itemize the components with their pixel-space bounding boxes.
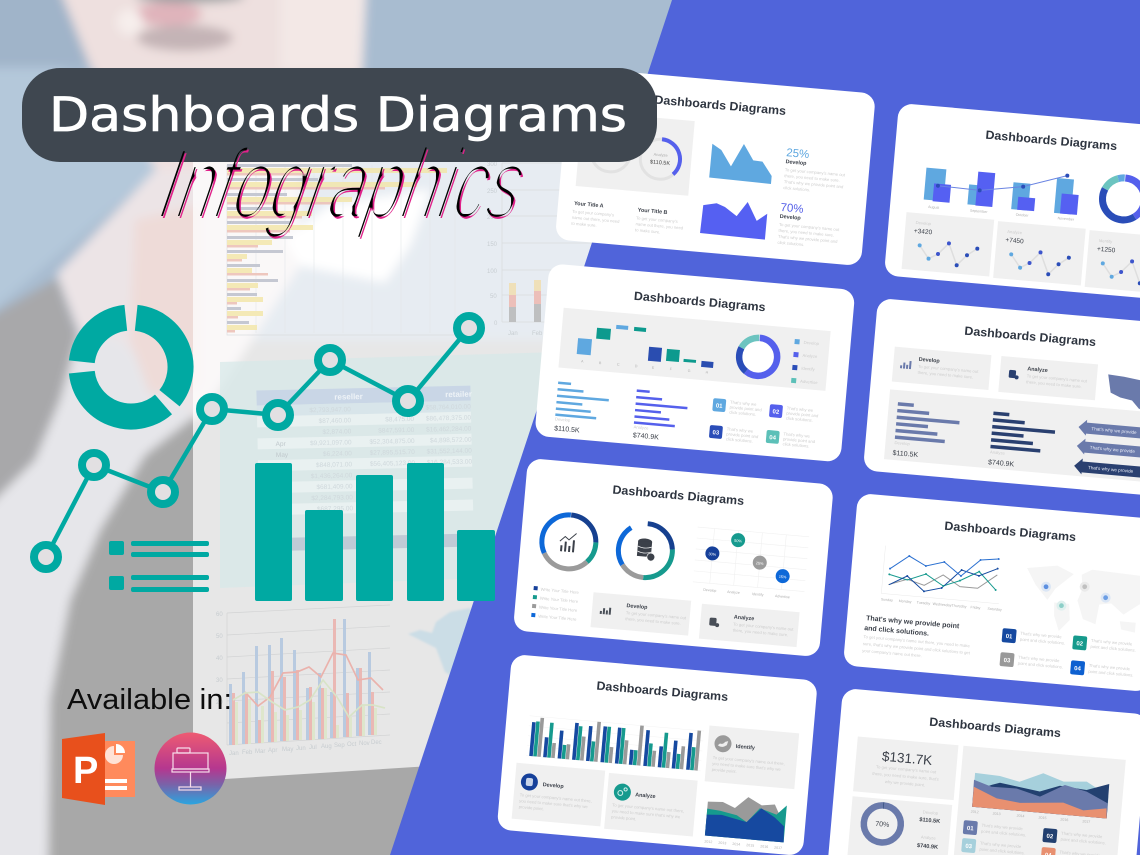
faded data table in background: $2,874.00 [322,428,352,436]
faded combo chart with months in background: 30 [216,678,223,684]
stacked area chart: 2014 [732,842,740,847]
faded data table in background: $2,284,793.00 [311,494,353,502]
numbered items: 01 [716,403,723,410]
stat 70%: That's why we provide point and [778,234,838,244]
area chart indigo [700,198,768,240]
faded data table in background: $1,436,264.00 [311,472,353,480]
stacked area panel: point and click solutions. [981,829,1026,838]
analyze panel [699,604,800,647]
faded data table in background: $2,793,947.00 [309,406,351,414]
icon: teal bar chart [255,463,495,601]
title A block: Your Title A [574,201,604,209]
title B block: name out there, you need [635,221,684,231]
faded data table in background: $87,460.00 [318,417,352,425]
KPI card identify: Identify [1099,238,1113,244]
numbered items: 02 [1076,641,1084,648]
multi line chart [881,546,1007,612]
legend: Write Your Title Here [540,596,579,604]
faded stacked bar chart in background: Feb [532,331,543,337]
slide 1: gauges and area charts [555,67,876,266]
slide 3: donuts and bubble chart: Dashboards Diagrams [612,483,745,508]
develop panel: To get your company's name out there, [520,792,592,804]
numbered items: point and click solutions. [1090,644,1136,653]
faded data table in background: $16,462,284.00 [426,426,472,434]
numbered items: 04 [769,435,777,442]
bars and arrows panel: Develop [894,440,911,446]
KPI card identify: +1250 [1097,246,1116,254]
analyze panel: Analyze [734,615,754,622]
tilted slide mockups [497,67,1140,855]
numbered items: click solutions. [782,441,810,449]
revenue panel [853,736,958,800]
faded data table in background: $681,409.00 [316,483,353,491]
stat 25%: there, you need to make sure. [784,173,840,183]
develop panel: you need to make sure that's why we [519,798,589,809]
donut panel: Analyze [921,834,937,841]
heading and description: sure, that's why we provide point and click solutions to get [863,641,971,655]
numbered items: That's why we provide [1089,663,1131,671]
title pill [22,68,657,162]
faded stacked bar chart in background: Jan [508,331,518,337]
faded data table in background: Apr [276,441,287,448]
bubble chart: 25% [756,561,764,566]
numbered items: That's why we [730,400,757,407]
title B block: Your Title B [637,207,668,216]
stacked area panel: 2015 [1038,816,1047,820]
bubble chart: Advertise [775,594,790,599]
multi line chart: Saturday [987,607,1002,612]
area chart light blue [709,141,774,184]
legend: Write Your Title Here [539,605,578,613]
legend: Write Your Title Here [538,614,577,622]
stat 25%: That's why we provide point and [784,179,844,189]
slide 5: combo chart and KPI cards: Dashboards Diagrams [985,128,1118,153]
stacked area panel [953,746,1126,855]
stat 25%: To get your company's name out [785,167,846,177]
donut chart [1101,176,1140,222]
multi line chart: Tuesday [917,601,931,606]
donut two with database icon [616,521,675,580]
faded stacked bar chart in background: 250 [487,189,498,195]
faded combo chart with months in background: Aug [321,744,332,750]
faded combo chart with months in background: May [282,747,293,753]
faded combo chart with months in background: 40 [216,656,223,662]
stacked area panel: 02 [1046,834,1054,840]
bubble chart: Analyze [727,590,740,595]
legend [531,586,580,622]
icon: PowerPoint [62,733,135,805]
develop panel: Develop [919,357,941,365]
gauges panel: Analyze [653,152,669,158]
faded combo chart with months in background: Nov [359,741,370,747]
bubble chart [692,527,809,601]
title A block: To get your company's [572,209,614,217]
icon: teal list [109,541,209,592]
develop panel: there, you need to make sure. [625,616,681,626]
faded data table in background: $31,552,144.00 [427,448,472,456]
develop panel [512,763,605,826]
stacked area panel: That's why we provide [981,823,1024,831]
stat 25%: Develop [785,159,807,167]
faded data table in background: $8,475.00 [385,416,415,424]
title B block [635,208,683,234]
heading and description: That's why we provide point [866,615,960,630]
faded stacked bar chart in background [487,162,592,335]
icon: PowerPoint: P [73,750,98,792]
donut panel [847,796,952,855]
bubble chart: 15% [779,575,787,580]
numbered items: provide point and [783,436,816,444]
faded data table in background: May [276,452,289,459]
revenue panel: there, you need to make sure, that's [872,771,939,782]
stat 70% [778,203,839,246]
identify panel: you need to make sure that's why we [712,761,782,772]
analyze panel: To get your company's name out [1027,373,1088,384]
icon: segmented teal donut [82,318,181,417]
slide 8: revenue and stacked area [826,688,1140,855]
faded stacked bar chart in background: 300 [487,162,498,168]
script subtitle: Infographics [151,128,536,242]
bars and arrows panel: That's why we provide [1090,445,1136,454]
analyze panel: there, you need to make sure. [1026,379,1082,389]
analyze panel: To get your company's name out [733,622,795,632]
stacked area chart: 2013 [718,841,726,845]
faded data table in background: $16,284,533.00 [427,459,473,467]
stat 70%: To get your company's name out [779,222,840,232]
faded data table in background: $52,304,875.00 [369,438,415,446]
faded data table in background: $58,764,010.00 [426,404,471,412]
waterfall and donut panel: C [617,363,620,367]
stacked area chart: 2015 [746,843,754,848]
numbered items: That's why we provide [1018,655,1060,663]
title B block: To get your company's [636,215,678,224]
title A block: name out there, you need [572,215,620,224]
develop panel: Develop [542,782,565,790]
faded data table in background: reseller [334,392,363,402]
stacked area chart: 2017 [774,846,782,850]
bubble chart: Identify [752,592,764,597]
heading and description [862,615,973,662]
analyze panel: Analyze [1027,366,1048,374]
available in label: Available in: [67,684,232,716]
numbered items: click solutions. [726,436,753,444]
develop panel [591,592,691,636]
faded combo chart with months in background: Jul [309,745,317,751]
KPI card analyze: Analyze [1007,229,1023,235]
KPI card develop: Develop [915,220,932,226]
faded combo chart with months in background: 60 [216,612,223,618]
bars and arrows panel: That's why we provide [1088,465,1134,474]
bars and arrows panel: $740.9K [988,459,1015,469]
analyze panel: provide point. [611,814,636,821]
bar and line chart [924,168,1079,221]
waterfall and donut panel: Identify [801,366,816,372]
analyze panel: there, you need to make sure. [733,628,788,637]
analyze bars: Analyze [633,424,649,431]
script subtitle: Infographics: Infographics [151,128,535,240]
analyze panel: you need to make sure that's why we [611,808,681,819]
donut panel: 70% [875,821,890,829]
stat 70%: there, you need to make sure. [778,228,834,238]
bars and arrows panel: Analyze [990,449,1006,456]
faded data table in background: $86,478,375.00 [426,415,472,423]
analyze panel [998,356,1098,400]
numbered items: That's why we [727,426,754,434]
numbered items: click solutions. [729,410,756,417]
slide 5: combo chart and KPI cards [884,103,1140,302]
semi-transparent white screen panel behind graphics [193,162,592,779]
donut one with chart icon [540,513,598,571]
develop panel: there, you need to make sure. [917,370,973,380]
faded data table in background: $56,405,123.00 [370,460,416,468]
heading and description: your company's name out there. [862,648,922,658]
faded combo chart with months in background: Sep [334,743,345,749]
faded combo chart with months in background: Apr [268,748,277,754]
identify panel: provide point. [711,767,737,774]
KPI card identify [1085,230,1140,295]
numbered items: point and click solutions. [1020,637,1065,646]
faded data table in background: $9,921,097.00 [310,439,352,447]
analyze panel [604,773,698,836]
faded data table in background [220,352,560,588]
icon: teal line chart with ring markers [34,316,481,569]
numbered items: 02 [772,409,780,416]
develop panel: To get your company's name out [626,610,687,620]
stat 70%: 70% [780,202,804,216]
numbered items: That's why we provide [1020,631,1062,639]
waterfall and donut panel: Advertise [800,379,818,385]
bars and arrows panel: $110.5K [892,450,919,459]
slide 2: waterfall chart and bars [534,263,855,462]
slide 6: analysis with arrows and map [863,298,1140,497]
stacked area panel: point and click solutions. [1060,837,1106,845]
multi line chart: Thursday [951,604,967,609]
slide 8: revenue and stacked area: Dashboards Diagrams [929,715,1062,740]
numbered items: provide point and [786,411,819,418]
stacked area chart: 2016 [760,844,768,849]
develop bars: $110.5K [554,425,580,435]
donut panel: $740.9K [917,843,938,851]
develop panel: provide point. [519,804,544,811]
faded combo chart with months in background: Mar [255,749,265,755]
stacked area panel: 2014 [1016,814,1025,818]
develop panel: To get your company's name out [918,364,979,374]
KPI card analyze [993,221,1086,286]
faded stacked bar chart in background: 150 [487,242,498,248]
faded data table in background: $847,591.00 [378,427,415,435]
title B block: to make sure. [635,227,661,234]
bars and arrows panel [884,389,1140,484]
develop bars [554,382,610,437]
waterfall and donut panel: F [670,367,673,371]
stacked area panel: 2017 [1082,819,1090,824]
faded combo chart with months in background: 20 [216,700,223,706]
faded data table in background: $27,895,515.70 [370,449,415,457]
numbered items: That's why we [787,406,814,413]
icon: Keynote [154,732,226,804]
stat 70%: click solutions. [777,240,805,247]
bubble chart: 30% [708,552,717,557]
develop panel [892,347,991,390]
analyze bars [632,389,689,444]
stacked area chart: 2012 [704,839,713,844]
faded data table in background: $848,071.00 [316,461,353,469]
numbered items: 01 [1005,634,1013,641]
faded data table in background: $687,295.00 [317,505,354,513]
numbered items: 03 [712,430,720,437]
stat 25%: click solutions. [783,185,810,192]
revenue panel: To get your company's name out [876,764,937,775]
blue diagonal panel [390,0,1140,855]
bar and line chart: November [1057,216,1075,222]
analyze panel: Analyze [635,792,656,800]
numbered items: point and click solutions. [1018,661,1063,670]
develop panel: Develop [626,603,648,611]
stat 25%: 25% [786,147,810,161]
heading and description: To get your company's name out there, you need to make [863,634,971,648]
revenue panel: $131.7K [881,749,933,768]
numbered items: point and click solutions. [1088,669,1134,678]
multi line chart: Monday [899,599,912,604]
donut panel: Develop [923,809,939,816]
stat 70%: Develop [779,214,802,222]
identify panel: Identify [735,744,755,752]
multi line chart: Sunday [881,597,893,602]
KPI card develop: +3420 [914,228,933,236]
waterfall and donut panel: Analyze [802,353,818,359]
multi line chart: Wednesday [932,602,952,608]
gauges panel: $110.5K [650,159,671,167]
faded combo chart with months in background: Oct [347,742,357,748]
revenue panel: why we provide point. [885,779,925,788]
stat 25% [783,148,845,192]
faded data table in background: retailer [445,390,472,399]
waterfall and donut panel: B [599,361,602,365]
slide 7: line chart and world map: Dashboards Diagrams [944,519,1077,544]
numbered items: That's why we provide [1091,638,1133,647]
bars and arrows panel: That's why we provide [1091,426,1137,435]
slide 4: grouped bar chart [497,654,818,855]
identify panel [705,725,799,789]
donut panel: $110.5K [919,817,940,825]
faded combo chart with months in background: Dec [371,740,382,746]
faded stacked bar chart in background: 200 [487,215,498,221]
waterfall and donut panel: H [705,370,709,375]
faded stacked bar chart in background: 100 [487,269,498,275]
identify panel: To get your company's name out there, [713,755,785,766]
title pill: Dashboards Diagrams [49,88,627,143]
faded combo chart with months in background [216,605,390,757]
analyze bars: $740.9K [632,432,659,442]
USA map [1105,374,1140,412]
numbered items: 04 [1074,666,1082,673]
develop bars: Develop [555,416,571,423]
title A block [572,201,620,227]
slide 2: waterfall chart and bars: Dashboards Diagrams [633,289,766,314]
numbered items: That's why we [783,431,811,439]
numbered items: 03 [1003,658,1011,664]
waterfall and donut panel: A [581,359,584,364]
waterfall and donut panel: E [652,366,655,370]
KPI card develop [902,212,994,277]
numbered items: click solutions. [786,416,813,423]
stacked area panel: 2012 [971,810,979,814]
legend: Write Your Title Here [540,587,580,595]
grouped bars [526,716,704,771]
waterfall and donut panel [558,308,831,391]
slide 4: grouped bar chart: Dashboards Diagrams [596,679,729,704]
faded stacked bar chart in background: 0 [494,321,498,327]
numbered items: provide point and [729,405,763,412]
stacked area panel: That's why we provide [1061,831,1103,839]
waterfall and donut panel: G [687,369,691,373]
stacked area chart [704,794,787,850]
stacked area panel: 03 [965,844,973,850]
bar and line chart: September [970,209,988,214]
faded horizontal bar chart in background [227,164,455,335]
bubble chart: 50% [734,539,743,544]
faded stacked bar chart in background: 50 [490,294,497,300]
bar and line chart: October [1016,213,1029,218]
script subtitle: Infographics: Infographics [153,130,536,242]
waterfall and donut panel: D [635,364,638,368]
faded combo chart with months in background: Jan [229,751,239,757]
world map [1022,563,1140,638]
stacked area panel: 2016 [1060,817,1069,822]
numbered items [999,628,1137,680]
slide 6: analysis with arrows and map: Dashboards Diagrams [964,324,1097,349]
analyze panel: To get your company's name out there, [612,802,684,814]
faded combo chart with months in background: 50 [216,634,223,640]
stacked area panel: 01 [967,826,974,832]
slide 7: line chart and world map [843,493,1140,692]
gauges panel [576,111,695,196]
slide 1: gauges and area charts: Dashboards Diagrams [654,93,787,118]
slide 3: donuts and bubble chart [513,458,834,657]
faded combo chart with months in background: Feb [242,750,253,756]
stacked area panel: 2013 [992,812,1001,816]
faded map in background [409,608,471,675]
bar and line chart: August [928,205,939,210]
numbered items [709,398,820,449]
title A block: to make sure. [571,221,597,228]
heading and description: and click solutions. [864,625,929,638]
waterfall and donut panel: Develop [803,340,820,346]
KPI card analyze: +7450 [1005,237,1024,245]
faded data table in background: $4,898,572.00 [430,437,472,445]
faded data table in background: $6,224.00 [323,450,352,458]
bubble chart: Develop [703,588,716,593]
stacked area panel: That's why we provide [980,841,1022,849]
numbered items: provide point and [726,431,759,439]
multi line chart: Friday [970,605,981,610]
faded combo chart with months in background: Jun [296,746,306,752]
